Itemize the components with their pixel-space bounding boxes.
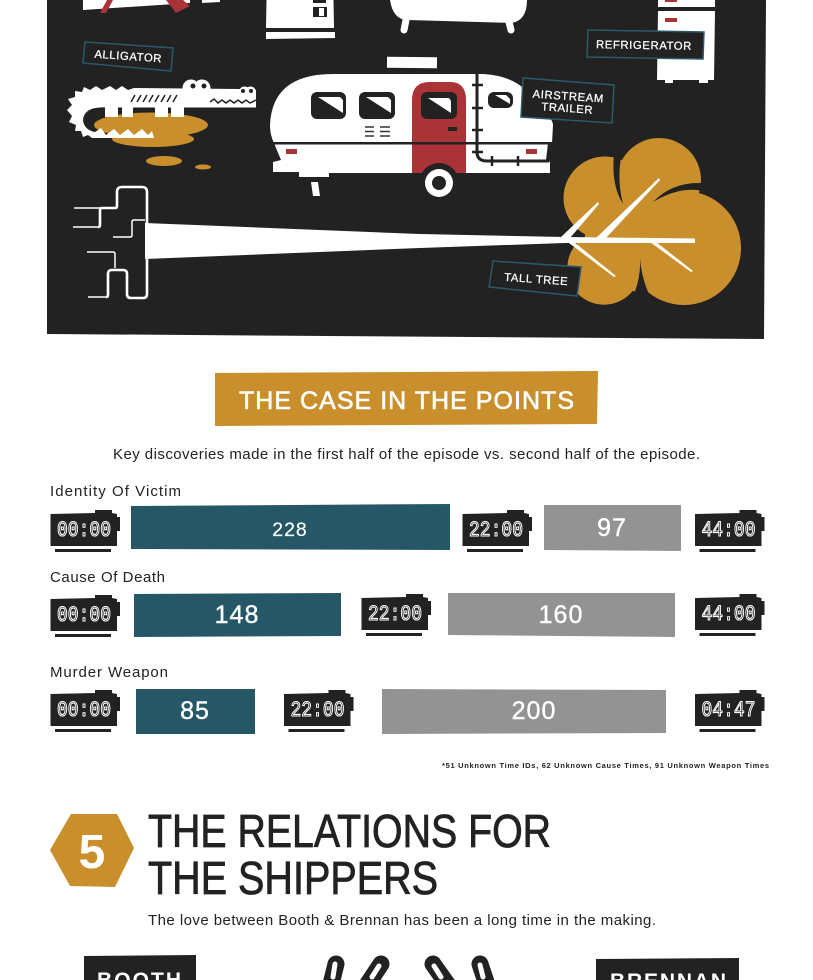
name tag: booth <box>84 955 196 980</box>
clock 00:00 <box>50 595 120 637</box>
icon: shoes <box>330 964 488 980</box>
clock 44:00: 44:00 <box>702 518 756 543</box>
section heading <box>148 805 551 904</box>
label: refrigerator: REFRIGERATOR <box>596 39 692 53</box>
row: identity of victim: Identity Of Victim <box>50 483 181 500</box>
clock 04:47 <box>695 690 764 732</box>
bar: second half 160: 160 <box>539 601 583 629</box>
bar: second half 200: 200 <box>512 697 556 725</box>
icon: bathtub <box>390 0 527 30</box>
icon: tall tree <box>73 138 741 305</box>
section intro text: The love between Booth & Brennan has been a long time in the making. <box>148 912 656 929</box>
badge: number 5 <box>50 814 134 887</box>
bar: first half 148: 148 <box>215 601 259 629</box>
label: alligator <box>83 42 173 71</box>
icon: cabinet <box>266 0 335 39</box>
name tag: brennan <box>596 958 739 980</box>
icon: puddle <box>94 112 211 170</box>
label: tall tree: TALL TREE <box>504 272 569 288</box>
bar: second half 200 <box>382 689 666 734</box>
section heading: THE RELATIONS FOR <box>148 805 551 857</box>
row: cause of death <box>50 569 764 637</box>
clock 22:00 <box>284 690 354 732</box>
icon: airstream trailer <box>270 57 553 197</box>
icon: refrigerator <box>657 0 715 83</box>
section heading: THE SHIPPERS <box>148 852 438 904</box>
clock 44:00 <box>695 594 764 636</box>
row: murder weapon: Murder Weapon <box>50 664 168 681</box>
clock 00:00 <box>50 510 120 552</box>
footnote: *51 Unknown Time IDs, 62 Unknown Cause Times, 91 Unknown Weapon Times <box>442 761 769 770</box>
clock 22:00: 22:00 <box>290 698 344 723</box>
clock 22:00 <box>362 594 431 636</box>
bar: first half 228: 228 <box>272 519 308 541</box>
clock 00:00: 00:00 <box>57 698 111 723</box>
bar: first half 85 <box>136 689 255 734</box>
clock 22:00: 22:00 <box>469 518 523 543</box>
label: tall tree <box>489 261 581 296</box>
label: airstream trailer <box>521 78 614 123</box>
row: cause of death: Cause Of Death <box>50 569 165 586</box>
clock 22:00: 22:00 <box>368 602 422 627</box>
row: identity of victim <box>50 483 764 552</box>
heading banner: the case in the points <box>215 371 598 426</box>
row: murder weapon <box>50 664 764 734</box>
clock 22:00 <box>462 510 532 552</box>
clock 04:47: 04:47 <box>702 698 756 723</box>
panel: objects illustration <box>47 0 766 339</box>
bar: first half 148 <box>134 593 341 637</box>
bar: second half 97: 97 <box>597 514 627 542</box>
bar: second half 97 <box>544 505 681 551</box>
clock 44:00: 44:00 <box>702 602 756 627</box>
icon: alligator <box>67 80 256 138</box>
bar: first half 228 <box>131 504 450 550</box>
clock 00:00 <box>50 690 120 732</box>
bar: second half 160 <box>448 593 675 637</box>
bar: first half 85: 85 <box>180 697 210 725</box>
clock 44:00 <box>695 510 764 552</box>
icon: paper with red ribbon <box>83 0 220 13</box>
badge: number 5: 5 <box>79 826 105 879</box>
heading banner: the case in the points: THE CASE IN THE POINTS <box>239 387 574 415</box>
label: airstream trailer: AIRSTREAM <box>532 89 604 105</box>
label: refrigerator <box>587 30 704 59</box>
clock 00:00: 00:00 <box>57 603 111 628</box>
intro text: Key discoveries made in the first half of the episode vs. second half of the episode. <box>113 446 700 463</box>
label: alligator: ALLIGATOR <box>94 49 162 65</box>
label: airstream trailer: TRAILER <box>541 101 594 117</box>
clock 00:00: 00:00 <box>57 518 111 543</box>
